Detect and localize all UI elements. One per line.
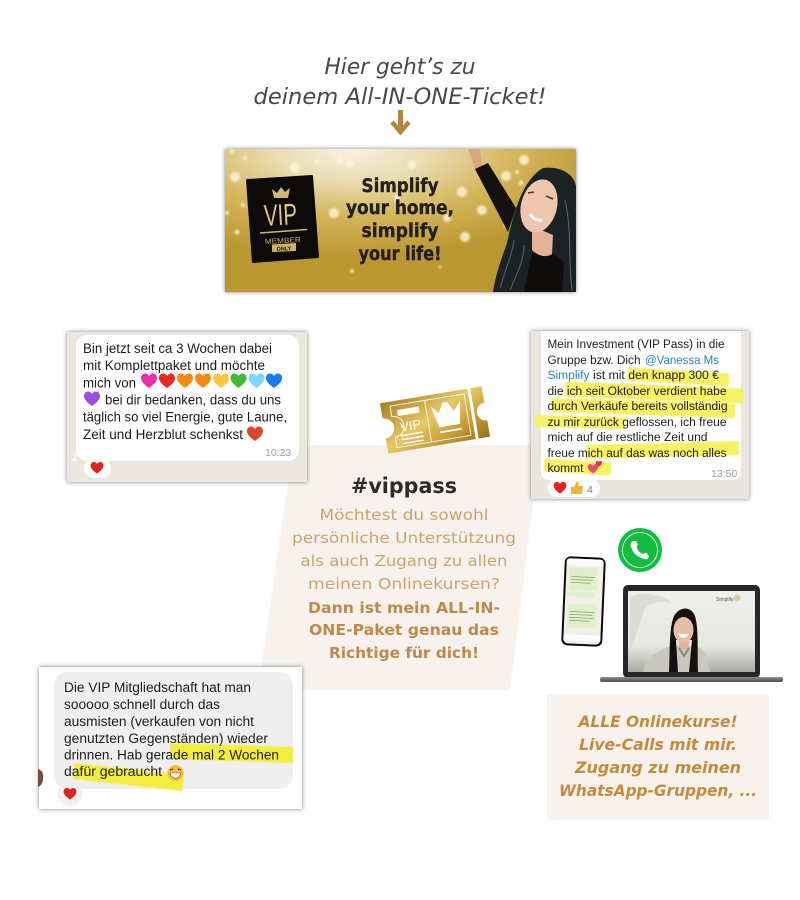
reactions: 4 (587, 484, 593, 496)
panel: chat testimonial left: täglich so viel Energie, gute Laune, (83, 410, 287, 424)
description: meinen Onlinekursen? (308, 575, 500, 593)
laptop mockup (600, 585, 783, 682)
description: Möchtest du sowohl (320, 506, 488, 524)
panel: features box: WhatsApp-Gruppen, ... (559, 781, 757, 800)
panel: chat testimonial right: kommt (548, 461, 584, 475)
reaction (58, 782, 82, 806)
description: persönliche Unterstützung (292, 529, 516, 547)
avatar (38, 769, 43, 787)
heading: deinem All-IN-ONE-Ticket! (254, 85, 546, 110)
speaker portrait (643, 608, 710, 672)
yellow highlights (535, 374, 743, 469)
panel: chat testimonial bottom: Die VIP Mitgliedschaft hat man (64, 680, 251, 695)
heading: Hier geht’s zu (324, 55, 476, 80)
emoji smile (168, 765, 184, 781)
panel: chat testimonial left: bei dir bedanken, dass du uns (105, 392, 281, 408)
panel: chat testimonial bottom: genutzten Gegenständen) wieder (64, 731, 269, 746)
description: als auch Zugang zu allen (300, 552, 508, 570)
VIP member card: VIP (263, 198, 298, 233)
panel: chat testimonial right (531, 331, 749, 499)
panel: chat testimonial right: Simplify (548, 368, 590, 382)
description (292, 506, 516, 593)
panel: chat testimonial right: ist mit den knapp 300 € (593, 368, 719, 382)
panel: features box: ALLE Onlinekurse! (577, 712, 738, 731)
timestamp: 13:50 (711, 468, 737, 480)
VIP member card: ONLY (276, 246, 292, 253)
banner: VIP all-in-one ticket (225, 149, 576, 292)
panel: chat testimonial right: die ich seit Oktober verdient habe (548, 384, 727, 398)
emoji hearts (84, 374, 282, 441)
VIP member card (247, 176, 318, 262)
panel: chat testimonial bottom: drinnen. Hab gerade mal 2 Wochen (64, 748, 279, 762)
banner slogan: Simplify (362, 176, 438, 197)
icon: golden VIP ticket (380, 384, 490, 456)
banner slogan: simplify (362, 221, 438, 242)
reactions (548, 479, 600, 497)
panel: chat testimonial right: @Vanessa Ms (645, 353, 719, 367)
VIP member card: MEMBER (265, 235, 302, 246)
panel: chat testimonial right: durch Verkäufe bereits vollständig (548, 399, 728, 413)
emoji two hearts (588, 461, 602, 474)
panel: chat testimonial left: Bin jetzt seit ca 3 Wochen dabei (83, 341, 272, 356)
call to action: Dann ist mein ALL-IN- (308, 599, 500, 617)
call to action: Richtige für dich! (329, 644, 479, 662)
panel: chat testimonial bottom: sooooo schnell durch das (64, 697, 220, 712)
panel: chat testimonial right: Gruppe bzw. Dich (548, 353, 641, 367)
banner slogan: your life! (358, 244, 442, 265)
panel: features box (547, 695, 769, 820)
heading (254, 55, 546, 110)
phone mockup (561, 556, 606, 647)
panel: features box: Live-Calls mit mir. (579, 735, 737, 754)
panel: chat testimonial right: zu mir zurück geflossen, ich freue (548, 415, 727, 429)
panel: chat testimonial right: mich auf die restliche Zeit und (548, 430, 708, 444)
banner slogan (346, 176, 454, 265)
panel: chat testimonial bottom (38, 667, 302, 809)
panel: chat testimonial bottom: dafür gebraucht (64, 764, 162, 779)
panel: chat testimonial bottom: ausmisten (verkaufen von nicht (64, 714, 254, 729)
reaction (84, 459, 111, 478)
panel: central beige background (258, 445, 540, 690)
call to action: ONE-Paket genau das (309, 621, 499, 639)
panel: features box: Zugang zu meinen (574, 758, 741, 777)
icon: golden VIP ticket: VIP (399, 416, 422, 435)
hashtag heading: #vippass (351, 474, 457, 498)
panel: chat testimonial right: Mein Investment (VIP Pass) in die (548, 337, 725, 351)
laptop mockup: Simplify (716, 597, 734, 603)
banner slogan: your home, (346, 198, 454, 219)
panel: chat testimonial left: mich von (83, 376, 136, 390)
panel: chat testimonial left: Zeit und Herzblut schenkst (83, 427, 243, 442)
arrow down (392, 110, 409, 132)
panel: chat testimonial left (67, 332, 307, 482)
panel: chat testimonial right: freue mich auf das was noch alles (548, 446, 726, 460)
call to action (308, 599, 500, 662)
woman waving (468, 149, 576, 292)
panel: central text (292, 474, 516, 662)
timestamp: 10:23 (265, 447, 291, 459)
panel: chat testimonial left: mit Komplettpaket und möchte (83, 358, 265, 373)
yellow highlights (74, 751, 293, 783)
icon: whatsapp phone (618, 528, 662, 572)
